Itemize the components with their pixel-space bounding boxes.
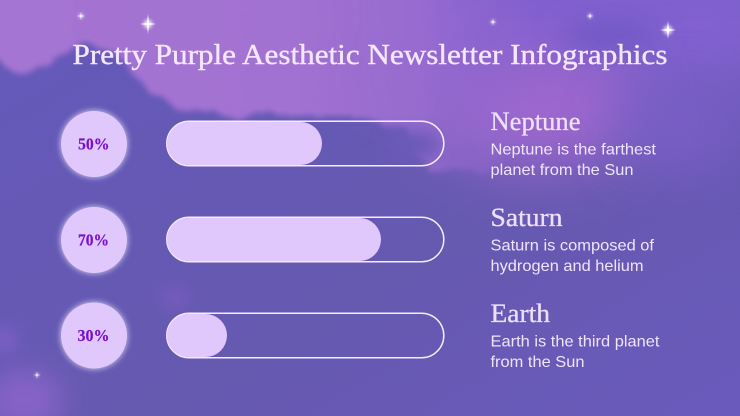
progress bar: 50% — [167, 121, 444, 166]
text block: Earth: Earth — [490, 299, 550, 328]
percent badge: 30%: 30% — [78, 326, 110, 345]
row: Saturn 70% — [60, 203, 655, 275]
text block: Earth — [490, 299, 660, 371]
progress bar: 30% — [167, 313, 444, 358]
row: Neptune 50% — [60, 107, 657, 179]
text block: Saturn: hydrogen and helium — [490, 258, 644, 275]
title: Pretty Purple Aesthetic Newsletter Infographics — [72, 39, 668, 71]
row: Earth 30% — [60, 299, 660, 371]
percent badge: 50%: 50% — [78, 134, 110, 154]
text block: Neptune — [490, 107, 657, 179]
progress bar: 70% — [167, 217, 444, 262]
percent badge: 50% — [60, 110, 128, 178]
text block: Earth: Earth is the third planet — [490, 334, 660, 350]
percent badge: 30% — [60, 302, 128, 370]
percent badge: 70% — [60, 206, 128, 274]
text block: Saturn: Saturn — [490, 203, 562, 232]
text block: Neptune: planet from the Sun — [490, 162, 634, 179]
decorative sparkle stars — [34, 12, 676, 378]
text block: Saturn: Saturn is composed of — [490, 238, 655, 254]
text block: Saturn — [490, 203, 655, 275]
text block: Neptune: Neptune is the farthest — [490, 142, 657, 158]
percent badge: 70%: 70% — [78, 230, 109, 250]
text block: Earth: from the Sun — [490, 354, 584, 371]
text block: Neptune: Neptune — [490, 107, 580, 136]
